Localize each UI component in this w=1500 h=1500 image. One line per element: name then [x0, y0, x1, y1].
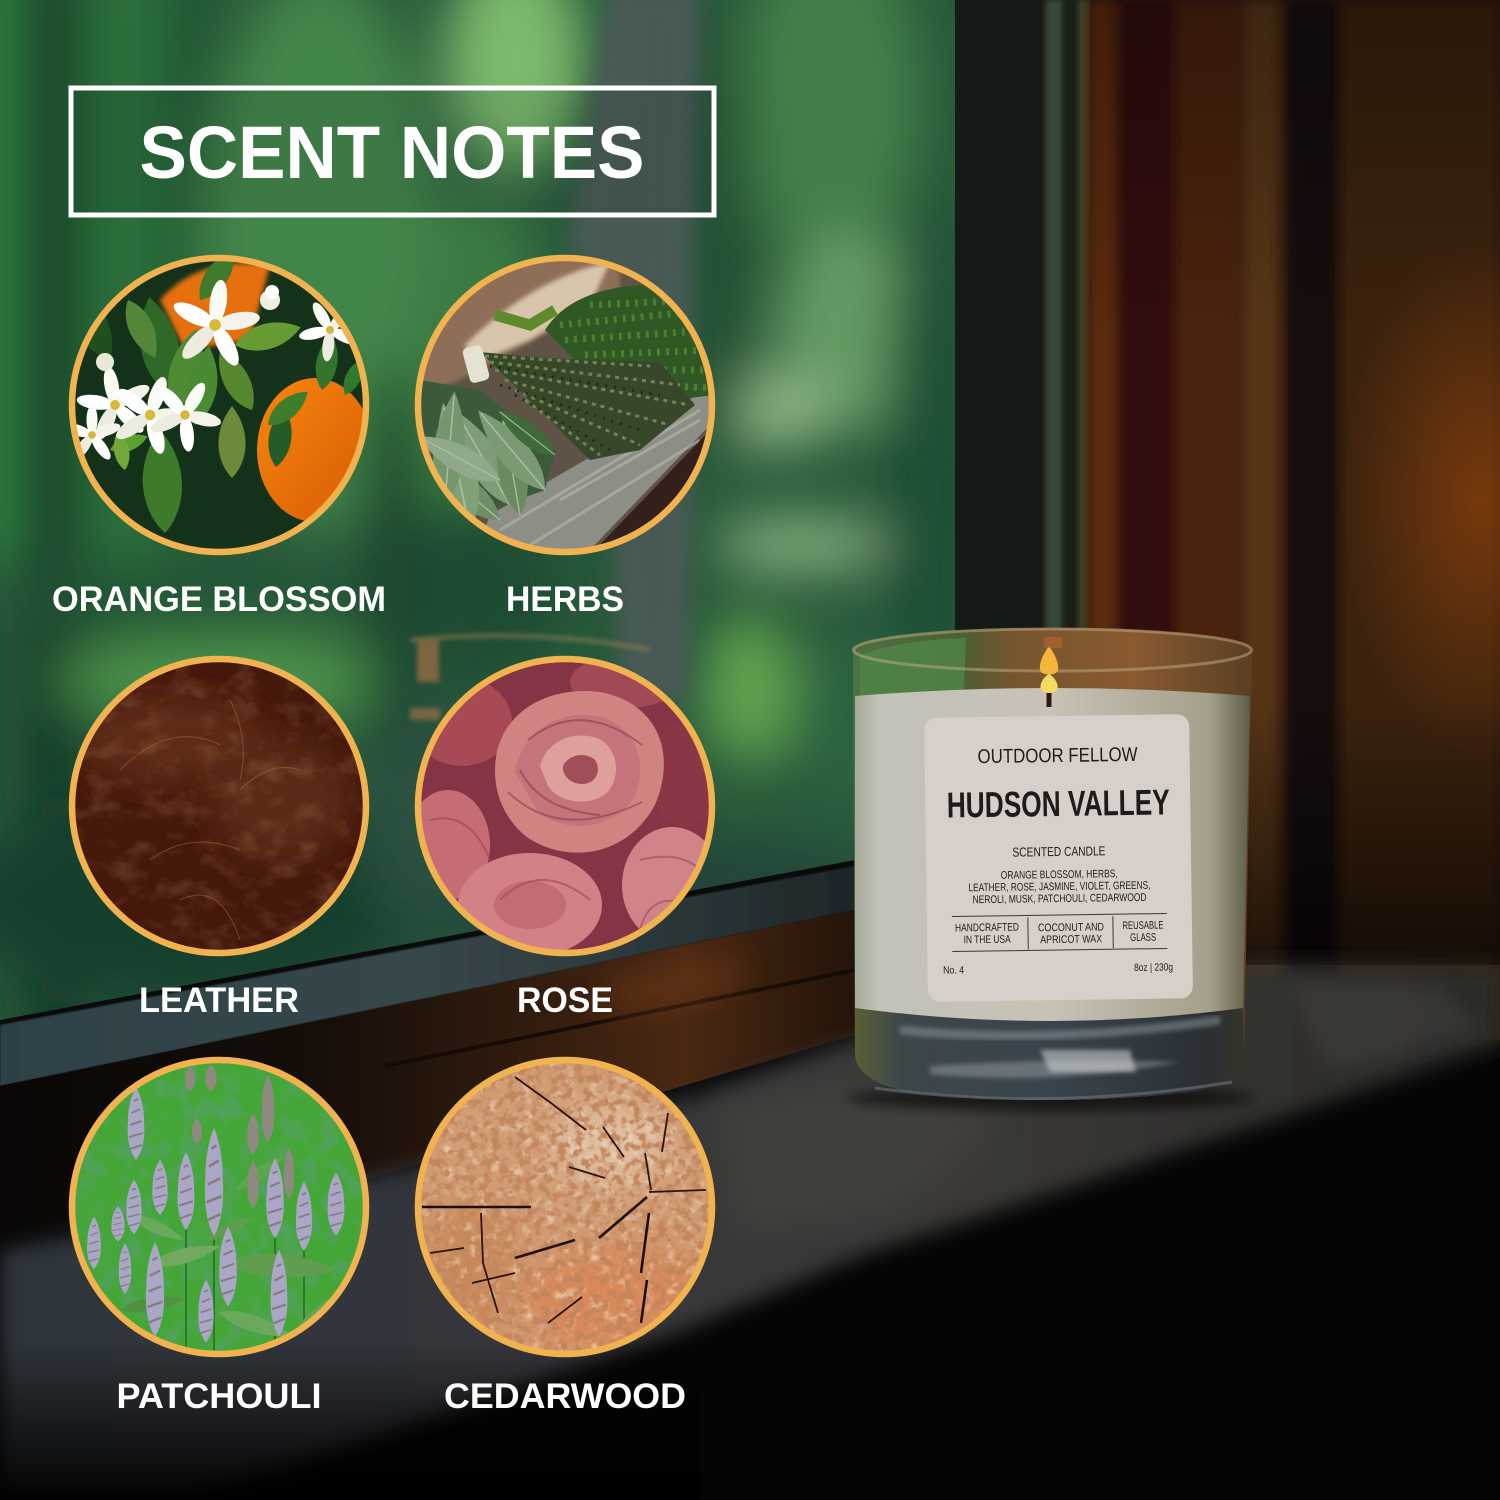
- label: LEATHER: [139, 981, 299, 1020]
- photo: herbs: [411, 255, 715, 555]
- scent note: orange blossom: [52, 244, 386, 619]
- window sill: [0, 860, 1500, 1500]
- ingredient list: ORANGE BLOSSOM, HERBS,: [1001, 868, 1118, 882]
- scent note: cedarwood: [415, 1057, 720, 1416]
- number and weight: No. 4: [943, 964, 964, 977]
- wooden board: [486, 396, 709, 549]
- forest view: [0, 0, 965, 1110]
- ring: [418, 1060, 712, 1354]
- attributes table: APRICOT WAX: [1040, 933, 1103, 946]
- thyme bundle: [480, 352, 695, 460]
- number and weight: [943, 961, 1173, 977]
- flame and wick: [1040, 637, 1062, 707]
- candle label: [924, 714, 1193, 1002]
- photo: cedarwood: [415, 1057, 720, 1357]
- title box: [71, 88, 714, 215]
- attributes table: GLASS: [1130, 932, 1156, 944]
- ledge surface: [0, 965, 1500, 1500]
- label: PATCHOULI: [116, 1377, 322, 1416]
- title: SCENT NOTES: [140, 111, 644, 194]
- ingredient list: LEATHER, ROSE, JASMINE, VIOLET, GREENS,: [968, 880, 1150, 894]
- scent note: herbs: [411, 255, 715, 619]
- ring: [72, 1060, 366, 1354]
- tree trunk: [570, 0, 700, 700]
- ring: [72, 659, 366, 953]
- dill bundle: [545, 285, 715, 400]
- window frame and curtain: [955, 0, 1500, 1040]
- ring: [418, 258, 712, 552]
- glass base: [855, 1008, 1244, 1100]
- glass jar: [853, 628, 1252, 1100]
- attributes table: [952, 913, 1167, 951]
- ring: [418, 659, 712, 953]
- label: ROSE: [517, 981, 613, 1020]
- ring: [72, 258, 366, 552]
- candle: [845, 628, 1255, 1110]
- ingredient list: NEROLI, MUSK, PATCHOULI, CEDARWOOD: [973, 892, 1147, 906]
- attributes table: IN THE USA: [964, 934, 1011, 946]
- scent note: rose: [406, 656, 722, 1020]
- sage bundle: [420, 380, 555, 530]
- photo: leather: [69, 656, 369, 956]
- attributes table: REUSABLE: [1122, 920, 1164, 932]
- candle name: HUDSON VALLEY: [946, 781, 1170, 826]
- photo: orange blossom: [75, 261, 363, 549]
- scent note: leather: [69, 656, 369, 1020]
- label: ORANGE BLOSSOM: [52, 580, 386, 619]
- attributes table: COCONUT AND: [1038, 921, 1104, 934]
- brand: OUTDOOR FELLOW: [977, 744, 1138, 768]
- attributes table: HANDCRAFTED: [955, 922, 1019, 934]
- reflection: [410, 636, 650, 720]
- subtitle: SCENTED CANDLE: [1012, 843, 1106, 860]
- label: CEDARWOOD: [444, 1377, 686, 1416]
- wax body: [855, 688, 1250, 1021]
- photo: patchouli: [69, 1057, 369, 1357]
- number and weight: 8oz | 230g: [1134, 961, 1173, 974]
- photo: rose: [421, 662, 709, 950]
- scent note: patchouli: [69, 1057, 369, 1416]
- label: HERBS: [506, 580, 624, 619]
- ingredient list: [968, 868, 1151, 906]
